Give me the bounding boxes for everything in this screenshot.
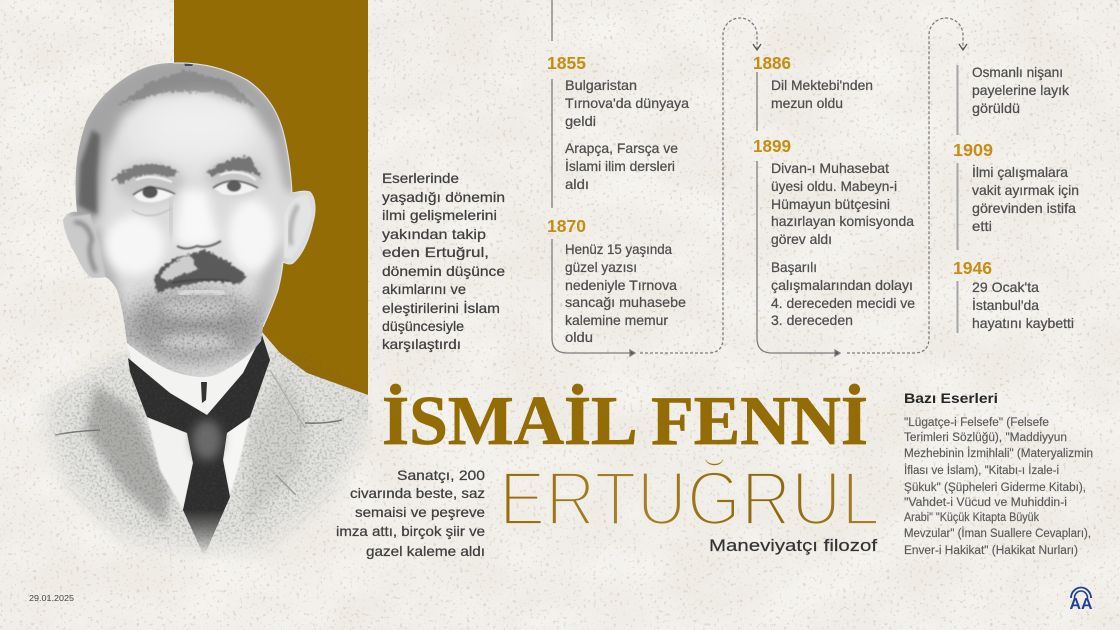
portrait: mustache (153, 250, 247, 292)
works list (904, 417, 1093, 557)
entry 1855: geldi (565, 113, 596, 129)
entry 1899 continued (972, 64, 1070, 116)
year 1909: 1909 (953, 140, 993, 160)
portrait photograph (30, 55, 372, 570)
entry 1899: 4. dereceden mecidi ve (771, 295, 915, 311)
intro text block: eleştirilerini İslam (382, 299, 500, 316)
entry 1946 (972, 279, 1074, 331)
subtitle: Maneviyatçı filozof (709, 536, 877, 555)
intro text block: düşüncesiyle (382, 318, 464, 334)
title: first line: İSMAİL FENNİ (382, 383, 868, 460)
portrait: stubble and chin (124, 290, 260, 362)
works list: İflası ve İslam), "Kitabı-ı İzale-i (904, 464, 1059, 477)
entry 1946: 29 Ocak'ta (972, 279, 1039, 295)
entry 1855: Tırnova'da dünyaya (565, 95, 689, 111)
composer text block: imza attı, birçok şiir ve (336, 523, 485, 539)
timeline column 2 (753, 53, 915, 328)
entry 1909: etti (972, 218, 992, 234)
entry 1909: İlmi çalışmalara (972, 163, 1068, 180)
intro text block: ilmi gelişmelerini (382, 207, 497, 223)
date: 29.01.2025 (29, 593, 74, 603)
entry 1855: Arapça, Farsça ve (565, 140, 678, 156)
works list: Arabi" "Küçük Kitapta Büyük (904, 512, 1039, 524)
intro text block: yaşadığı dönemin (382, 189, 505, 205)
intro text block: akımlarını ve (382, 281, 466, 297)
composer text block: civarında beste, saz (350, 485, 485, 501)
entry 1899: Başarılı (771, 259, 817, 275)
entry 1909: görevinden istifa (972, 200, 1076, 216)
entry 1899 continued: görüldü (972, 100, 1020, 116)
entry 1946: İstanbul'da (972, 296, 1039, 313)
year 1870: 1870 (547, 216, 586, 236)
intro text block: karşılaştırdı (382, 336, 461, 352)
icon: AA agency logo: AA (1070, 596, 1093, 613)
intro text block: yakından takip (382, 226, 486, 242)
entry 1870: oldu (565, 329, 593, 345)
entry 1899: hazırlayan komisyonda (771, 213, 914, 229)
works panel (904, 390, 1093, 557)
portrait: cutout outline (173, 63, 315, 327)
year 1899: 1899 (753, 136, 791, 156)
timeline column 3 (953, 64, 1079, 331)
entry 1899: 3. dereceden (771, 312, 853, 328)
composer text block: gazel kaleme aldı (366, 543, 485, 559)
portrait: face shading (95, 225, 130, 344)
composer text block: semaisi ve peşreve (355, 504, 485, 520)
year 1855: 1855 (547, 53, 586, 73)
works list: "Lügatçe-i Felsefe" (Felsefe (904, 417, 1049, 429)
entry 1899 continued: Osmanlı nişanı (972, 64, 1063, 80)
portrait: necktie (128, 335, 270, 556)
works list: Terimleri Sözlüğü), "Maddiyyun (904, 432, 1067, 444)
year 1886: 1886 (753, 53, 791, 73)
entry 1886 (771, 77, 873, 111)
entry 1899: üyesi oldu. Mabeyn-i (771, 178, 897, 194)
entry 1870: güzel yazısı (565, 259, 637, 275)
timeline connectors, column 2 (757, 18, 967, 356)
entry 1899: Hümayun bütçesini (771, 196, 890, 212)
works list: Mezhebinin İzmihlali" (Materyalizmin (904, 447, 1093, 460)
timeline column 3 rules (956, 65, 958, 333)
gold panel (174, 0, 368, 395)
entry 1870: nedeniyle Tırnova (565, 277, 677, 293)
works heading: Bazı Eserleri (904, 390, 998, 406)
entry 1899 continued: payelerine layık (972, 82, 1070, 98)
entry 1855: aldı (565, 176, 589, 192)
intro text block: dönemin düşünce (382, 263, 505, 279)
works list: Mevzular" (İman Suallere Cevapları), (904, 527, 1091, 540)
entry 1855: Bulgaristan (565, 77, 637, 93)
entry 1899 (771, 160, 915, 328)
composer text block: Sanatçı, 200 (397, 467, 485, 483)
intro text block (382, 170, 505, 352)
entry 1870 (565, 241, 686, 345)
entry 1870: sancağı muhasebe (565, 294, 686, 310)
entry 1855: İslami ilim dersleri (565, 157, 675, 174)
portrait: head (63, 63, 314, 377)
portrait: shirt (127, 337, 262, 510)
entry 1909: vakit ayırmak için (972, 182, 1079, 198)
timeline column 1 (547, 53, 689, 345)
entry 1886: mezun oldu (771, 95, 843, 111)
year 1946: 1946 (953, 258, 992, 278)
entry 1899: çalışmalarından dolayı (771, 277, 913, 293)
entry 1899: Divan-ı Muhasebat (771, 160, 889, 176)
intro text block: Eserlerinde (382, 170, 459, 186)
portrait: ears (62, 214, 106, 280)
entry 1899: görev aldı (771, 231, 832, 247)
entry 1909 (972, 163, 1079, 234)
entry 1886: Dil Mektebi'nden (771, 77, 873, 93)
works list: "Vahdet-i Vücud ve Muhiddin-i (904, 497, 1067, 509)
portrait: brows (113, 164, 178, 183)
composer text block (336, 467, 485, 559)
entry 1870: Henüz 15 yaşında (565, 241, 672, 257)
works list: Şükuk" (Şüpheleri Giderme Kitabı), (904, 482, 1086, 494)
entry 1946: hayatını kaybetti (972, 315, 1074, 331)
intro text block: eden Ertuğrul, (382, 244, 489, 260)
portrait: hair (70, 56, 296, 225)
icon: AA agency logo (1070, 588, 1093, 613)
portrait: collar stud (201, 382, 207, 403)
entry 1855 (565, 77, 689, 192)
portrait: suit jacket (30, 332, 372, 570)
portrait: eyes (133, 187, 175, 202)
entry 1870: kalemine memur (565, 312, 668, 328)
timeline connectors, column 1 (552, 0, 761, 356)
portrait: nose (176, 190, 220, 246)
works list: Enver-i Hakikat" (Hakikat Nurları) (904, 545, 1078, 557)
title: second line: ERTUĞRUL (499, 456, 880, 542)
